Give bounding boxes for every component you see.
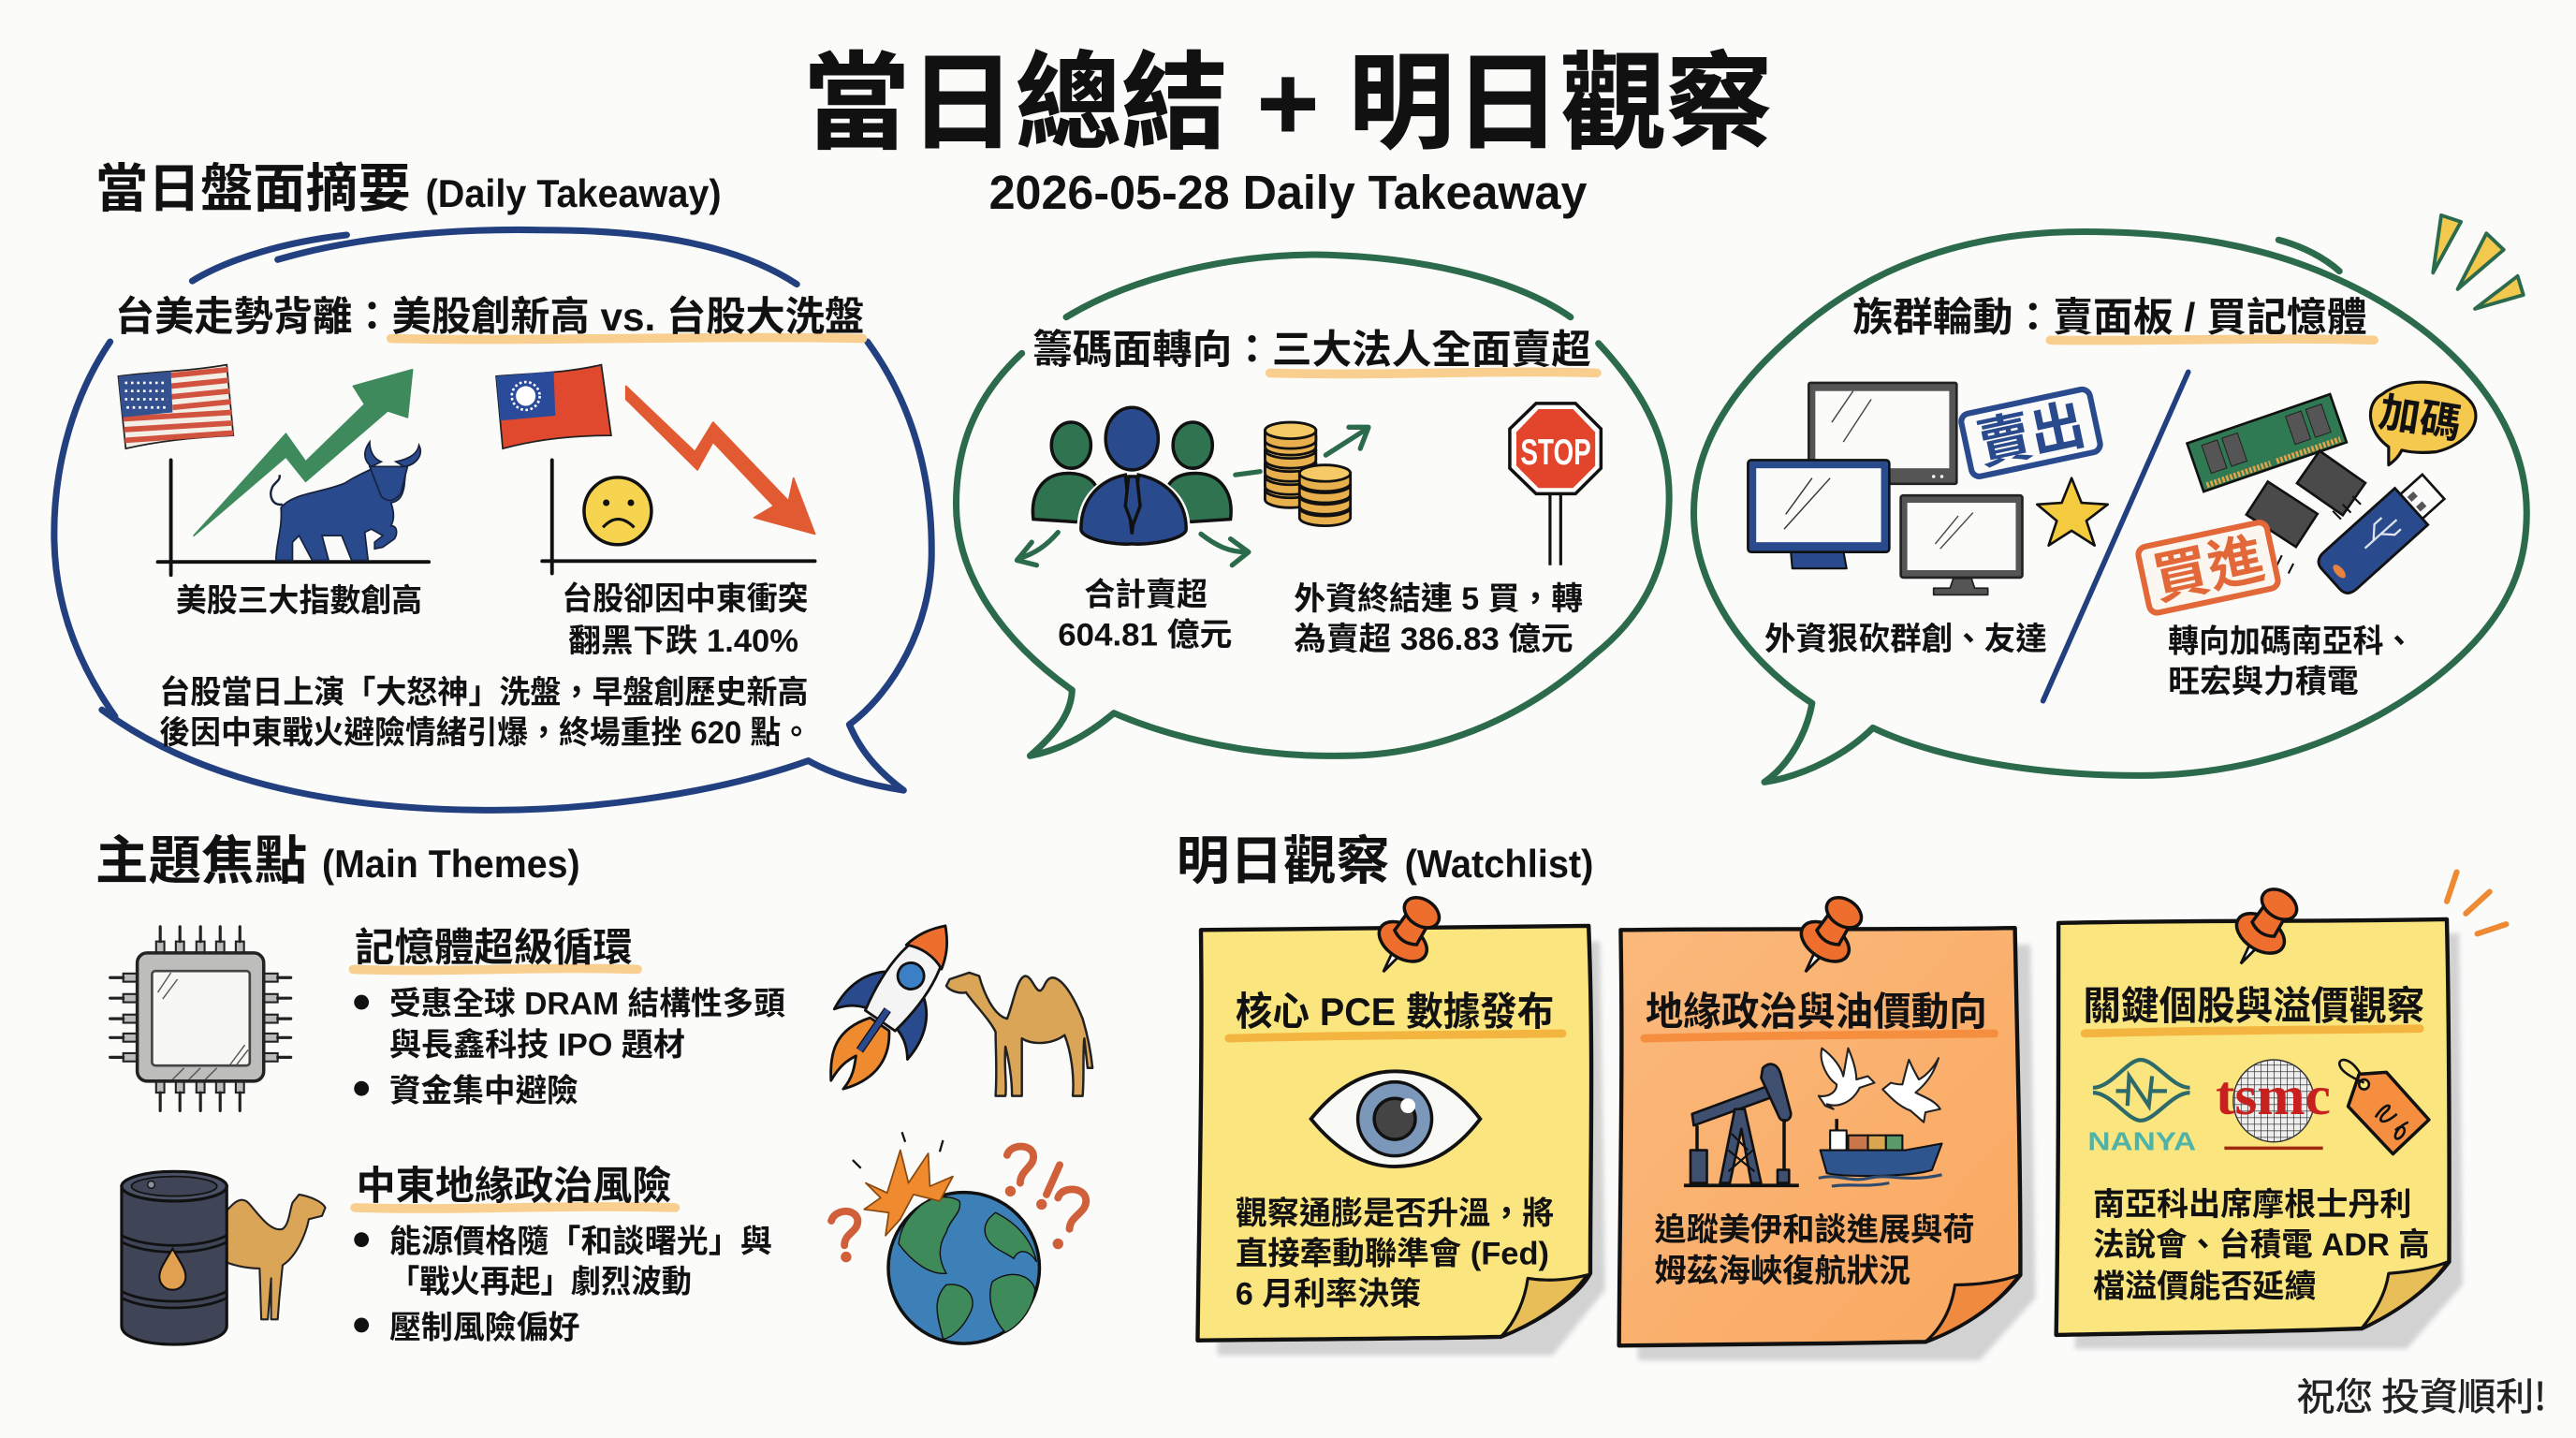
caption: Taiwan stock drop bbox=[562, 581, 809, 659]
note text: 6 月利率決策 bbox=[1236, 1276, 1421, 1312]
callout: add position: 加碼 bbox=[2376, 389, 2464, 448]
caption: total net sell: 合計賣超 bbox=[1084, 578, 1208, 613]
bullets: geopolitics: 壓制風險偏好 bbox=[389, 1310, 580, 1345]
caption: Taiwan stock drop: 翻黑下跌 1.40% bbox=[568, 624, 798, 659]
heading: daily takeaway bbox=[95, 159, 722, 218]
panel: US vs Taiwan divergence bubble bbox=[54, 229, 931, 810]
heading: watchlist: (Watchlist) bbox=[1405, 842, 1593, 886]
pin bbox=[1783, 888, 1873, 986]
icon: monitors bbox=[1748, 383, 2022, 594]
icon: microchip bbox=[110, 927, 291, 1110]
icon: oil barrel bbox=[122, 1171, 227, 1344]
arrows: outflow bbox=[1017, 427, 1368, 565]
icon: cargo ship bbox=[1819, 1119, 1942, 1186]
caption: Taiwan stock drop: 台股卻因中東衝突 bbox=[562, 581, 809, 617]
theme heading: middle east risk: 中東地緣政治風險 bbox=[357, 1164, 672, 1208]
note heading: 核心 PCE 數據發布 bbox=[1236, 990, 1554, 1034]
stamp: sell: 賣出 bbox=[1972, 395, 2090, 477]
closing message: 祝您 投資順利! bbox=[2297, 1366, 2546, 1421]
icon: stop sign: STOP bbox=[1520, 433, 1591, 473]
heading: watchlist bbox=[1177, 831, 1593, 890]
bubble title: 籌碼面轉向：三大法人全面賣超 bbox=[1032, 328, 1591, 373]
note fold bbox=[2362, 1262, 2448, 1328]
icon: eye bbox=[1311, 1071, 1480, 1167]
panel: main themes bbox=[110, 901, 1092, 1345]
note text bbox=[1654, 1212, 1975, 1289]
note text: 追蹤美伊和談進展與荷 bbox=[1654, 1212, 1975, 1248]
bubble title: 台美走勢背離：美股創新高 vs. 台股大洗盤 bbox=[115, 295, 864, 340]
note shadow bbox=[2075, 933, 2463, 1349]
bubble outline blue bbox=[54, 229, 931, 810]
arrow: green rising bbox=[194, 370, 413, 536]
icon: oil pumpjack bbox=[1684, 1064, 1799, 1185]
text block: market summary bbox=[159, 675, 812, 751]
caption: foreign selling: 外資狠砍群創、友達 bbox=[1764, 622, 2047, 657]
callout: add position bbox=[2370, 382, 2476, 465]
heading: daily takeaway: 當日盤面摘要 bbox=[95, 159, 411, 218]
note text: 直接牽動聯準會 (Fed) bbox=[1236, 1236, 1549, 1271]
bullets: memory bbox=[354, 987, 785, 1109]
icon: coin stacks bbox=[1265, 422, 1351, 526]
note paper bbox=[2056, 919, 2450, 1335]
heading: main themes bbox=[95, 831, 580, 890]
icon: institutional investors bbox=[1032, 407, 1231, 544]
date subtitle: 2026-05-28 Daily Takeaway bbox=[989, 166, 1588, 219]
logo: TSMC wafer bbox=[2216, 1060, 2331, 1148]
note paper bbox=[1197, 926, 1591, 1341]
heading: main themes: 主題焦點 bbox=[95, 831, 307, 890]
divider slash bbox=[2043, 372, 2188, 701]
icon: camel standing bbox=[946, 973, 1092, 1096]
caption: foreign investors bbox=[1294, 581, 1583, 657]
caption: total net sell bbox=[1058, 578, 1232, 653]
bubble outline green bbox=[956, 255, 1669, 756]
logo: TSMC wafer: tsmc bbox=[2216, 1064, 2331, 1126]
bullets: memory: 與長鑫科技 IPO 題材 bbox=[389, 1028, 685, 1064]
stamp: buy: 買進 bbox=[2147, 527, 2270, 611]
bullets: memory: 受惠全球 DRAM 結構性多頭 bbox=[389, 987, 785, 1022]
heading: main themes: (Main Themes) bbox=[322, 842, 580, 886]
logo: Nanya bbox=[2087, 1060, 2196, 1156]
note fold bbox=[1925, 1275, 2019, 1342]
caption: foreign investors: 為賣超 386.83 億元 bbox=[1294, 622, 1573, 657]
caption: foreign investors: 外資終結連 5 買，轉 bbox=[1294, 581, 1583, 617]
note fold bbox=[1500, 1275, 1587, 1337]
note text: 南亞科出席摩根士丹利 bbox=[2093, 1187, 2411, 1223]
note text bbox=[1236, 1196, 1554, 1312]
icon: Taiwan flag bbox=[496, 365, 611, 448]
panel: note PCE bbox=[1197, 888, 1605, 1356]
note text bbox=[2093, 1187, 2430, 1305]
note text: 姆茲海峽復航狀況 bbox=[1654, 1254, 1910, 1289]
caption: total net sell: 604.81 億元 bbox=[1058, 618, 1232, 653]
chart axes US bbox=[158, 460, 429, 575]
note text: 法說會、台積電 ADR 高 bbox=[2093, 1227, 2430, 1263]
note heading: 關鍵個股與溢價觀察 bbox=[2083, 984, 2424, 1028]
bullets: geopolitics: 「戰火再起」劇烈波動 bbox=[389, 1264, 692, 1299]
icon: RAM module bbox=[2188, 394, 2347, 492]
arrow: red falling bbox=[626, 386, 815, 534]
chart axes Taiwan bbox=[542, 460, 815, 574]
panel: institutional flows bubble bbox=[956, 255, 1669, 756]
logo: Nanya: NANYA bbox=[2087, 1127, 2196, 1156]
icon: star bbox=[2037, 478, 2108, 546]
note heading: 地緣政治與油價動向 bbox=[1646, 990, 1987, 1034]
note shadow bbox=[1218, 942, 1605, 1356]
heading: watchlist: 明日觀察 bbox=[1177, 831, 1390, 890]
panel: note geopolitics and oil bbox=[1619, 888, 2036, 1360]
icon: camel behind barrel bbox=[225, 1195, 326, 1319]
icon: rocket bbox=[799, 901, 983, 1109]
icon: stop sign bbox=[1510, 404, 1601, 565]
panel: sector rotation bubble bbox=[1693, 215, 2526, 782]
note shadow bbox=[1638, 945, 2036, 1360]
heading: daily takeaway: (Daily Takeaway) bbox=[426, 171, 722, 215]
pin bbox=[1361, 888, 1451, 986]
pin bbox=[2218, 879, 2308, 978]
theme heading: memory supercycle: 記憶體超級循環 bbox=[355, 926, 633, 970]
caption: buying memory bbox=[2168, 624, 2414, 700]
bubble outline green bbox=[1693, 231, 2526, 782]
text block: market summary: 後因中東戰火避險情緒引爆，終場重挫 620 點。 bbox=[159, 715, 812, 751]
caption: US indexes: 美股三大指數創高 bbox=[176, 583, 422, 619]
icon: doves bbox=[1819, 1049, 1940, 1123]
icon: price tag bbox=[2339, 1060, 2429, 1154]
bubble title: 族群輪動：賣面板 / 買記憶體 bbox=[1852, 296, 2367, 341]
bullets: memory: 資金集中避險 bbox=[389, 1074, 578, 1109]
note paper bbox=[1619, 928, 2020, 1345]
icon: burst marks bbox=[2433, 215, 2524, 309]
attention rays bbox=[2447, 873, 2506, 933]
icon: question and exclamation marks bbox=[831, 1147, 1086, 1261]
icon: globe bbox=[888, 1193, 1039, 1343]
icon: USB drive bbox=[2314, 468, 2450, 597]
caption: buying memory: 旺宏與力積電 bbox=[2168, 665, 2359, 700]
note text: 檔溢價能否延續 bbox=[2093, 1269, 2317, 1305]
caption: buying memory: 轉向加碼南亞科、 bbox=[2168, 624, 2414, 660]
icon: explosion bbox=[853, 1132, 953, 1236]
note text: 觀察通膨是否升溫，將 bbox=[1236, 1196, 1554, 1231]
icon: sad face bbox=[584, 477, 651, 545]
bullets: geopolitics: 能源價格隨「和談曙光」與 bbox=[389, 1224, 772, 1259]
bullets: geopolitics bbox=[354, 1224, 772, 1345]
icon: US flag bbox=[118, 365, 233, 448]
text block: market summary: 台股當日上演「大怒神」洗盤，早盤創歷史新高 bbox=[159, 675, 809, 711]
title: 當日總結 + 明日觀察 bbox=[803, 44, 1773, 162]
icon: bull bbox=[271, 442, 420, 560]
panel: note key stocks bbox=[2056, 873, 2506, 1349]
icon: memory chips bbox=[2247, 451, 2365, 574]
